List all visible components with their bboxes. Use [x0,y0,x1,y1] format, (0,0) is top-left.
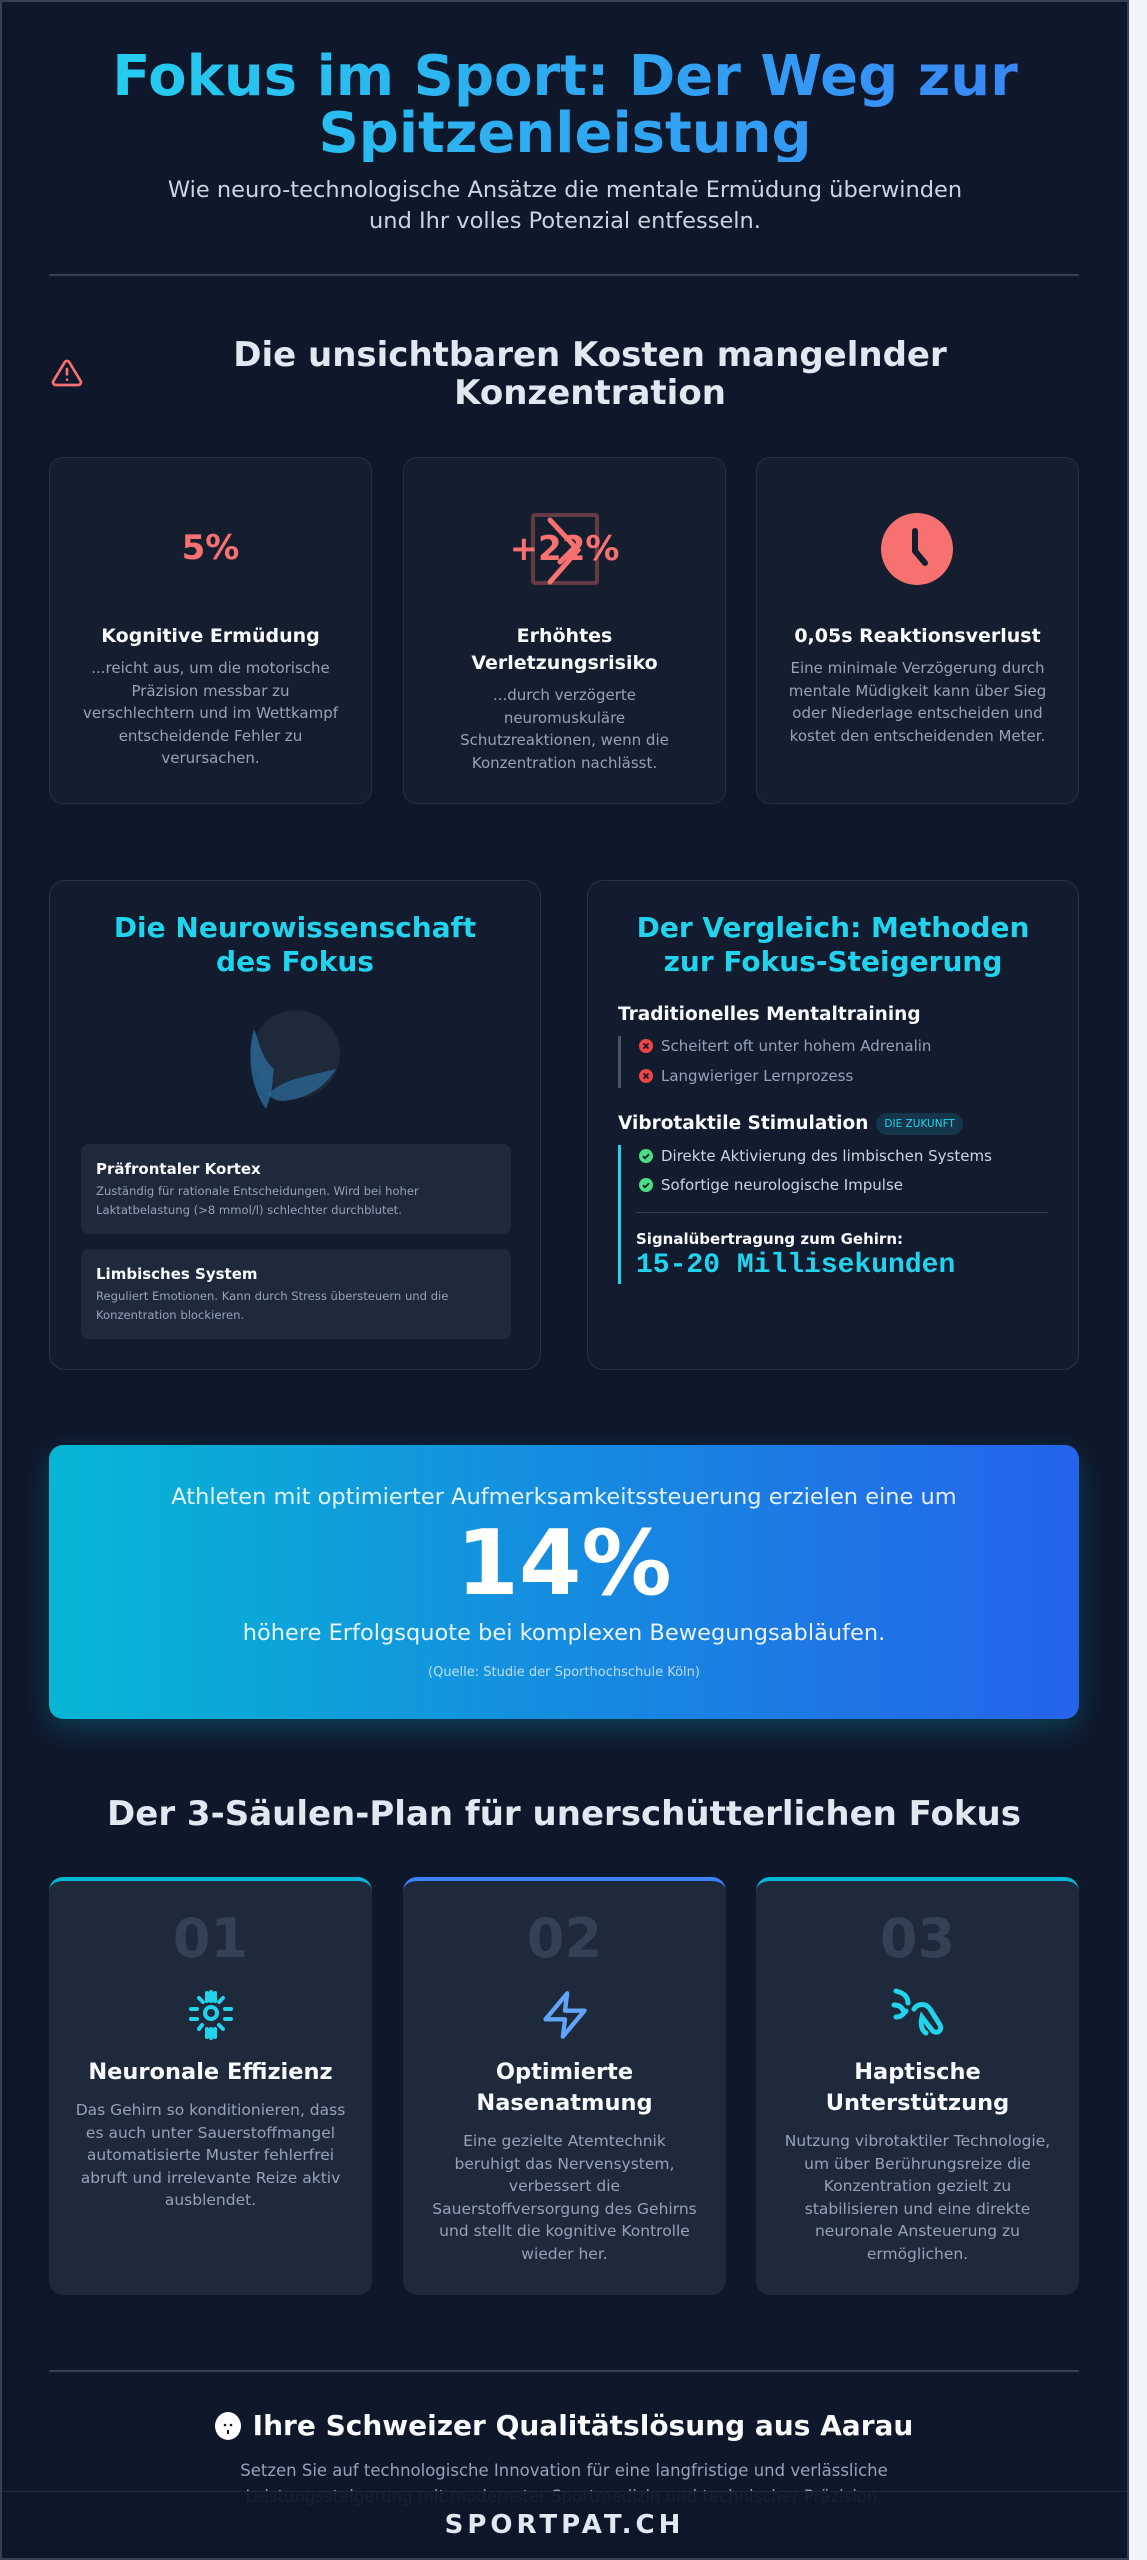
item: adrenaline: Scheitert oft unter hohem Adrenalin [661,1037,931,1055]
stat: 5%: 5% [182,528,239,568]
card: injury risk: ...durch verzögerte neuromuskuläre Schutzreaktionen, wenn die Konzentration nachlässt. [460,686,669,772]
pillar 03 [756,1877,1079,2295]
pillar 02: Optimierte [496,2059,633,2085]
heading: costs: Konzentration [454,373,726,413]
item: impulses: Sofortige neurologische Impulse [661,1176,903,1194]
heading: swiss quality: Ihre Schweizer Qualitätslösung aus Aarau [253,2409,913,2442]
pillar 03: Haptische [854,2059,981,2085]
icon: warning [52,360,82,386]
subtitle: Wie neuro-technologische Ansätze die mentale Ermüdung überwinden [168,177,962,203]
panel: comparison [587,880,1079,1370]
title [40,48,1090,162]
badge: future [876,1113,963,1135]
title: Spitzenleistung [318,101,812,166]
pillar 01: 01 [173,1907,248,1970]
card: injury risk: Verletzungsrisiko [471,652,658,674]
pillar 03: 03 [880,1907,955,1970]
pillar 01 [49,1877,372,2295]
heading: neuroscience [114,911,476,978]
icon: swiss badge [215,2412,241,2440]
text: closing: Setzen Sie auf technologische Innovation für eine langfristige und verlässliche Leistungssteigerung mit modernster Sportmedizin und technischer Präzision. [240,2461,888,2506]
box: prefrontal cortex: Präfrontaler Kortex [96,1160,261,1178]
pillar 03: Nutzung vibrotaktiler Technologie, um über Berührungsreize die Konzentration gezielt zu stabilisieren und eine direkte neuronale Ansteuerung zu ermöglichen. [785,2132,1050,2262]
stat: milliseconds: 15-20 Millisekunden [636,1250,955,1281]
subheading: traditional: Traditionelles Mentaltraining [618,1004,921,1025]
box: limbic system: Reguliert Emotionen. Kann durch Stress übersteuern und die Konzentration blockieren. [96,1289,448,1322]
heading: 3 pillars: Der 3-Säulen-Plan für unerschütterlichen Fokus [107,1794,1021,1834]
item: limbic activation: Direkte Aktivierung des limbischen Systems [661,1147,992,1165]
footer [2,2491,1127,2558]
panel: neuroscience [49,880,541,1370]
stat: +22%: +22% [510,529,619,569]
pillar 02: Nasenatmung [476,2090,653,2116]
card: injury risk [403,457,726,804]
pillar 02: 02 [527,1907,602,1970]
subtitle [168,177,962,234]
callout: 14% banner: höhere Erfolgsquote bei komplexen Bewegungsabläufen. [243,1620,885,1646]
callout: 14% banner: Athleten mit optimierter Aufmerksamkeitssteuerung erzielen eine um [171,1484,957,1510]
card: reaction loss: 0,05s Reaktionsverlust [794,625,1041,647]
card: cognitive fatigue [49,457,372,804]
title: Fokus im Sport: Der Weg zur [112,44,1018,109]
box: limbic system: Limbisches System [96,1265,258,1283]
footer: SPORTPAT.CH [445,2510,684,2540]
item: slow learning: Langwieriger Lernprozess [661,1067,853,1085]
stat: 14%: 14% [456,1511,672,1616]
icon: brain [250,1010,340,1109]
subheading: vibrotactile with badge: Vibrotaktile Stimulation [618,1113,868,1134]
card: reaction loss [756,457,1079,804]
heading: neuroscience: des Fokus [216,945,374,978]
box: prefrontal cortex [81,1144,511,1234]
pillar 01: Das Gehirn so konditionieren, dass es auch unter Sauerstoffmangel automatisierte Muster fehlerfrei abruft und irrelevante Reize aktiv ausblendet. [76,2101,345,2209]
heading: costs: Die unsichtbaren Kosten mangelnder [233,335,947,375]
icon: clock [881,513,953,585]
subheading: vibrotactile with badge [618,1113,963,1135]
heading: comparison: zur Fokus-Steigerung [664,945,1002,978]
subtitle: und Ihr volles Potenzial entfesseln. [369,208,761,234]
icon: injury box [531,513,599,585]
heading: comparison: Der Vergleich: Methoden [637,911,1029,944]
icon: lightning [543,1991,587,2039]
box: prefrontal cortex: Zuständig für rationale Entscheidungen. Wird bei hoher Laktatbelastung (>8 mmol/l) schlechter durchblutet. [96,1184,419,1217]
icon: neural [189,1990,233,2040]
label: signal transmission: Signalübertragung zum Gehirn: [636,1230,903,1248]
pillar 01: Neuronale Effizienz [88,2059,333,2085]
card: injury risk: Erhöhtes [517,625,612,647]
heading: comparison [637,911,1029,978]
icon: haptic hand [892,1988,944,2036]
badge: future: DIE ZUKUNFT [884,1118,955,1130]
card: cognitive fatigue: ...reicht aus, um die motorische Präzision messbar zu verschlechtern und im Wettkampf entscheidende Fehler zu verursachen. [83,659,338,767]
callout: 14% banner: (Quelle: Studie der Sporthochschule Köln) [428,1665,700,1680]
heading: costs [233,335,947,413]
pillar 02 [403,1877,726,2295]
card: reaction loss: Eine minimale Verzögerung durch mentale Müdigkeit kann über Sieg oder Niederlage entscheiden und kostet den entscheidenden Meter. [789,659,1046,744]
heading: neuroscience: Die Neurowissenschaft [114,911,476,944]
pillar 03: Unterstützung [826,2090,1009,2116]
callout: 14% banner [49,1445,1079,1719]
pillar 02: Eine gezielte Atemtechnik beruhigt das Nervensystem, verbessert die Sauerstoffversorgung des Gehirns und stellt die kognitive Kontrolle wieder her. [432,2132,697,2262]
box: limbic system [81,1249,511,1339]
card: cognitive fatigue: Kognitive Ermüdung [101,625,320,647]
